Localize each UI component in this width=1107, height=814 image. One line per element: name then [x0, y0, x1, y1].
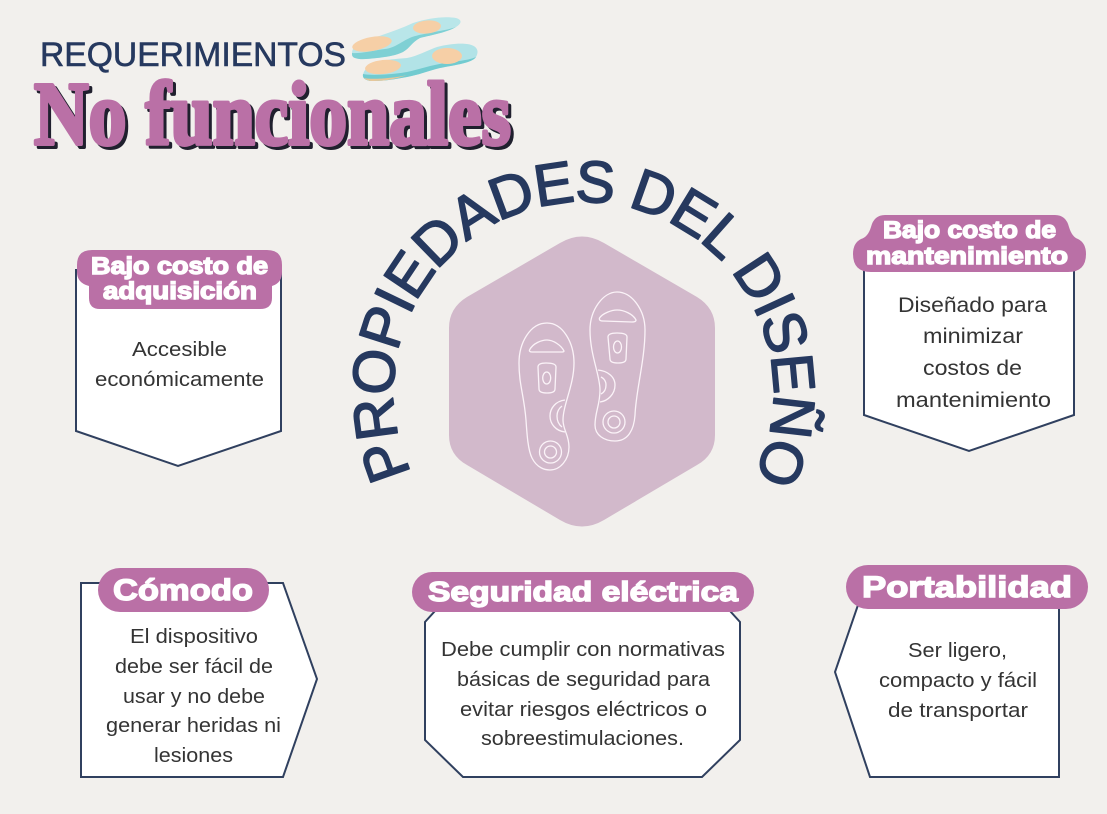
- body text: sobreestimulaciones.: [481, 727, 684, 750]
- body text: Ser ligero,: [908, 639, 1007, 662]
- heading text: Seguridad eléctrica: [428, 576, 738, 607]
- body text: [441, 638, 725, 750]
- icon: teal insoles: [351, 17, 478, 81]
- heading text: adquisición: [103, 278, 257, 305]
- body text: minimizar: [923, 324, 1023, 348]
- body text: mantenimiento: [896, 388, 1051, 412]
- panel: seguridad eléctrica: [412, 572, 754, 777]
- title: no funcionales: No funcionales: [34, 65, 511, 164]
- curved heading: propiedades del diseño: PROPIEDADES DEL DISEÑO: [352, 160, 825, 485]
- body text: compacto y fácil: [879, 669, 1037, 692]
- panel: bajo costo de mantenimiento: [853, 215, 1086, 451]
- heading pill: [853, 215, 1086, 272]
- body text: básicas de seguridad para: [457, 668, 711, 691]
- heading pill: [412, 572, 754, 612]
- body text: El dispositivo: [130, 625, 258, 648]
- body text: de transportar: [888, 699, 1028, 722]
- heading text: [866, 217, 1068, 270]
- heading pill: [77, 250, 282, 309]
- body text: evitar riesgos eléctricos o: [460, 698, 707, 721]
- icon: insole outlines: [519, 292, 645, 470]
- body text: Diseñado para: [898, 293, 1047, 317]
- heading text: Bajo costo de: [91, 253, 268, 280]
- body text: usar y no debe: [123, 685, 265, 708]
- central hexagon: [449, 236, 715, 526]
- panel: cómodo: [81, 568, 317, 777]
- title: no funcionales: No funcionales: [37, 68, 514, 167]
- body text: Debe cumplir con normativas: [441, 638, 725, 661]
- body text: debe ser fácil de: [115, 655, 273, 678]
- body text: [879, 639, 1037, 722]
- body text: costos de: [923, 356, 1022, 380]
- body text: [896, 293, 1051, 412]
- heading pill: [846, 565, 1088, 609]
- heading text: Portabilidad: [862, 571, 1072, 604]
- heading pill: [98, 568, 269, 612]
- heading text: Bajo costo de: [883, 217, 1056, 244]
- panel: portabilidad: [835, 565, 1088, 777]
- body text: económicamente: [95, 368, 264, 391]
- heading text: [91, 253, 268, 305]
- body text: Accesible: [132, 338, 227, 361]
- heading text: Cómodo: [113, 574, 253, 607]
- heading text: mantenimiento: [866, 243, 1068, 270]
- body text: lesiones: [154, 744, 233, 767]
- panel: bajo costo de adquisición: [76, 250, 282, 466]
- body text: generar heridas ni: [106, 714, 281, 737]
- body text: [95, 338, 264, 391]
- title: requerimientos: REQUERIMIENTOS: [40, 36, 346, 74]
- body text: [106, 625, 281, 767]
